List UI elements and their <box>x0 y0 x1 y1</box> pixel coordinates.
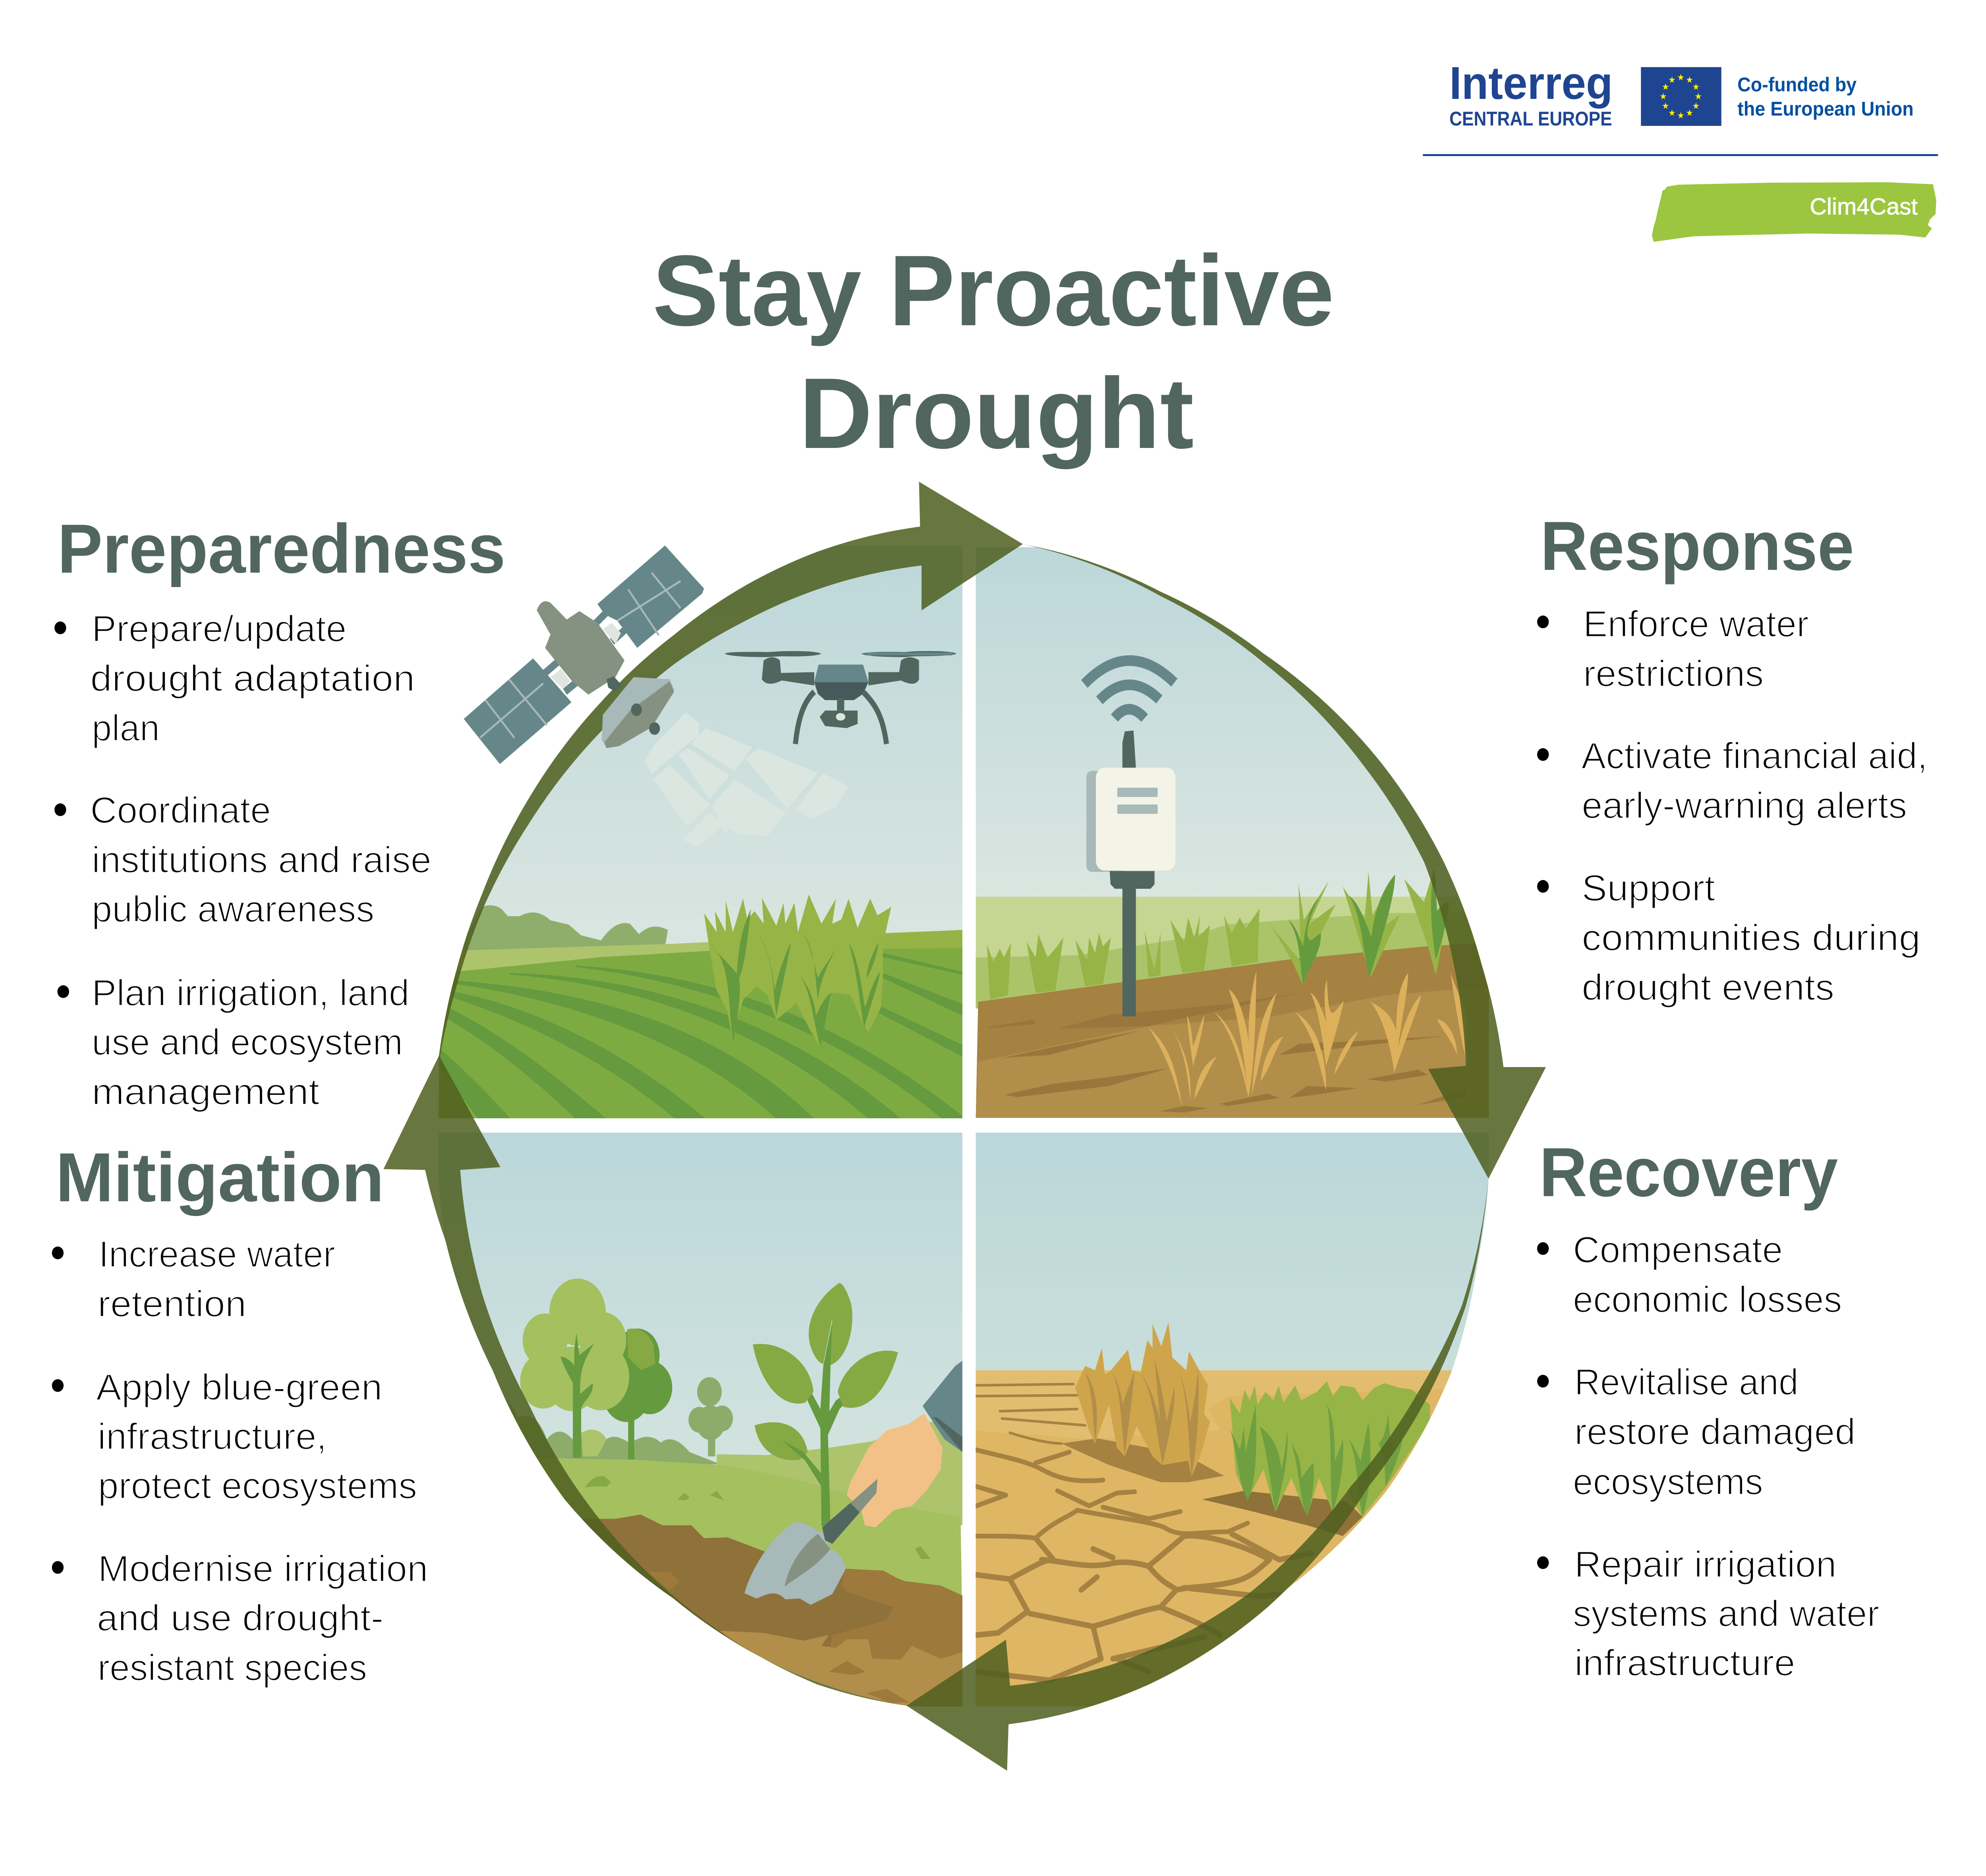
tree: small sage <box>688 1377 733 1456</box>
bullet: revitalise ecosystems <box>1537 1361 1855 1502</box>
bullet: plan irrigation: management <box>92 1071 320 1112</box>
background bushes <box>493 1398 720 1469</box>
title line two: Drought <box>799 357 1194 469</box>
bullet: repair irrigation: systems and water <box>1573 1593 1879 1634</box>
bullet: repair irrigation: Repair irrigation <box>1575 1544 1837 1585</box>
bullet: revitalise ecosystems: restore damaged <box>1575 1411 1855 1452</box>
bullet: support communities: communities during <box>1582 917 1920 958</box>
bullet: blue-green infrastructure <box>52 1366 417 1506</box>
bullet: compensate losses: economic losses <box>1573 1279 1842 1320</box>
bullet: drought plan <box>54 608 415 749</box>
bullet: coordinate institutions: public awareness <box>92 888 374 930</box>
bullet: repair irrigation <box>1537 1544 1879 1683</box>
icon: sapling <box>753 1283 898 1526</box>
bullet: water retention <box>52 1233 335 1324</box>
bullet: modernise irrigation: and use drought- <box>97 1597 383 1639</box>
mounds <box>1061 1438 1224 1482</box>
co-funded text line one: Co-funded by <box>1737 74 1857 96</box>
bullet: compensate losses: Compensate <box>1573 1229 1783 1270</box>
heading: response: Response <box>1540 507 1854 585</box>
bullet: drought plan: Prepare/update <box>92 608 346 649</box>
title line one: Stay Proactive <box>653 234 1334 347</box>
heading: mitigation: Mitigation <box>56 1139 384 1216</box>
co-funded text line two: the European Union <box>1737 98 1914 120</box>
bullet: water retention: retention <box>98 1283 246 1324</box>
arrow: cycle ring, preparedness to response <box>439 482 1023 1062</box>
dry grass plants <box>1075 1322 1210 1477</box>
bullet: support communities <box>1537 867 1920 1008</box>
panel: recovery scene with cracked earth <box>976 1132 1495 1715</box>
bullet: water retention: Increase water <box>99 1233 335 1275</box>
crop plants <box>704 894 891 1047</box>
bullet: support communities: drought events <box>1582 967 1834 1008</box>
text block: mitigation <box>52 1139 428 1688</box>
text block: response <box>1537 507 1928 1008</box>
bullet: water restrictions: restrictions <box>1583 653 1764 694</box>
circular illustration <box>435 539 1495 1715</box>
logo block: Interreg Central Europe and EU co-funding <box>1449 57 1914 130</box>
bullet: blue-green infrastructure: protect ecosystems <box>98 1465 417 1506</box>
bullet: coordinate institutions <box>54 789 431 930</box>
bullet: modernise irrigation: resistant species <box>98 1647 367 1688</box>
bullet: modernise irrigation: Modernise irrigation <box>98 1548 428 1589</box>
icon: trowel <box>744 1479 877 1605</box>
icon: EU flag <box>1641 67 1721 126</box>
bullet: blue-green infrastructure: Apply blue-green <box>96 1366 383 1408</box>
bullet: compensate losses <box>1537 1229 1842 1320</box>
icon: hand <box>847 1361 962 1527</box>
bullet: drought plan: drought adaptation <box>90 658 415 699</box>
arrow: cycle ring, mitigation to preparedness <box>383 1056 906 1706</box>
bullet: water restrictions: Enforce water <box>1583 603 1809 645</box>
corn sprouts <box>1271 869 1450 985</box>
panel: mitigation scene with trees and planting hand <box>435 1133 962 1715</box>
bullet: financial aid <box>1537 735 1928 826</box>
panel: response scene with soil sensor <box>976 543 1495 1118</box>
bullet: blue-green infrastructure: infrastructure, <box>98 1416 327 1457</box>
bullet: water restrictions <box>1537 603 1809 694</box>
dry sprouts <box>1149 971 1468 1106</box>
panel: preparedness scene with field and crops <box>435 539 962 1119</box>
icon: soil sensor with wireless signal <box>1084 660 1176 1016</box>
divider: vertical and horizontal white cross <box>420 528 1502 1724</box>
icon: drone <box>724 651 956 744</box>
badge: Clim4Cast brush stroke <box>1652 182 1936 242</box>
bullet: repair irrigation: infrastructure <box>1575 1642 1795 1683</box>
arrow: cycle ring, response to recovery <box>1023 544 1546 1179</box>
header rule <box>1423 154 1938 156</box>
cracks in dry soil <box>976 1384 1311 1680</box>
tree: large light green <box>520 1279 672 1459</box>
bullet: coordinate institutions: Coordinate <box>90 789 271 831</box>
bullet: financial aid: Activate financial aid, <box>1581 735 1928 776</box>
title <box>653 234 1334 469</box>
bullet: support communities: Support <box>1582 867 1715 909</box>
arrow: cycle ring, recovery to mitigation <box>906 1179 1488 1771</box>
icon: satellite <box>464 546 704 764</box>
icon: satellite imagery of fields <box>644 713 848 846</box>
soil layers <box>976 942 1495 1118</box>
soil layers <box>580 1515 962 1715</box>
bullet: plan irrigation: Plan irrigation, land <box>92 972 410 1013</box>
text block: recovery <box>1537 1133 1879 1683</box>
badge text: Clim4Cast <box>1810 194 1918 219</box>
text block: preparedness <box>54 510 506 1112</box>
bullet: financial aid: early-warning alerts <box>1582 785 1907 826</box>
logo wordmark: Interreg: Interreg <box>1449 57 1613 109</box>
bullet: plan irrigation: use and ecosystem <box>92 1021 403 1063</box>
bullet: modernise irrigation <box>52 1548 428 1688</box>
grass tufts <box>987 909 1260 1000</box>
logo subtitle: Central Europe: CENTRAL EUROPE <box>1449 108 1612 130</box>
bullet: plan irrigation <box>57 972 410 1112</box>
heading: preparedness: Preparedness <box>57 510 506 587</box>
green grass plants <box>1230 1381 1430 1517</box>
bullet: revitalise ecosystems: ecosystems <box>1573 1461 1763 1502</box>
bullet: revitalise ecosystems: Revitalise and <box>1575 1361 1799 1403</box>
heading: recovery: Recovery <box>1539 1133 1838 1211</box>
bullet: coordinate institutions: institutions and raise <box>92 839 431 880</box>
bullet: drought plan: plan <box>92 707 160 749</box>
